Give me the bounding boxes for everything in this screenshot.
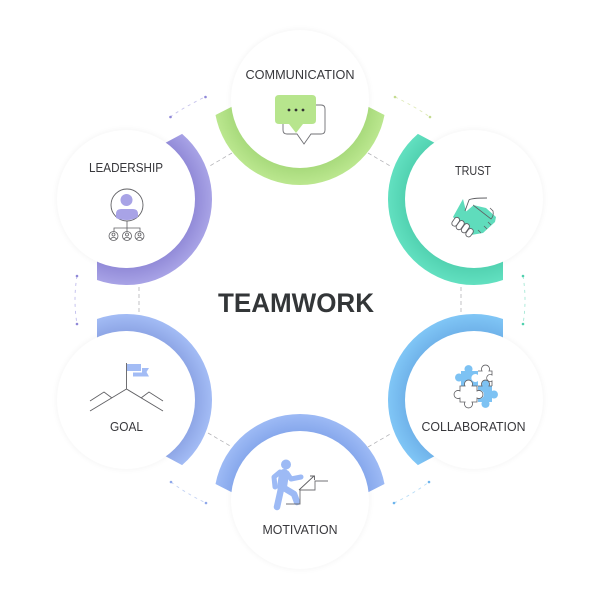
- arc: goal: [97, 314, 212, 465]
- disc shadow: leadership: [56, 129, 196, 269]
- disc shadow: motivation: [230, 430, 370, 570]
- label: collaboration: COLLABORATION: [422, 420, 526, 434]
- panel: collaboration: [388, 314, 544, 470]
- arc: communication: [216, 99, 384, 185]
- panel: leadership: [56, 129, 212, 285]
- arc: collaboration: [388, 314, 503, 465]
- icon: leader and team: [109, 189, 144, 240]
- label: leadership: LEADERSHIP: [89, 161, 163, 175]
- outer dashed link: leadership to goal: [75, 275, 78, 325]
- panel: communication: [216, 29, 384, 185]
- icon: person climbing stairs: [274, 460, 328, 507]
- arc: trust: [388, 134, 503, 285]
- panel: goal: [56, 314, 212, 470]
- disc shadow: collaboration: [404, 330, 544, 470]
- disc: collaboration: [405, 331, 543, 469]
- disc shadow: communication: [230, 29, 370, 169]
- label: goal: GOAL: [110, 420, 143, 434]
- icon: flag on mountain: [90, 363, 163, 411]
- panel: trust: [388, 129, 544, 285]
- outer dashed link: communication to trust: [394, 96, 431, 118]
- label: communication: COMMUNICATION: [246, 68, 354, 82]
- arc: motivation: [216, 414, 384, 500]
- disc: trust: [405, 130, 543, 268]
- title: TEAMWORK: [218, 288, 374, 318]
- disc shadow: goal: [56, 330, 196, 470]
- disc: motivation: [231, 431, 369, 569]
- icon: speech bubbles: [275, 95, 325, 144]
- inner dashed connectors: [139, 153, 461, 447]
- icon: puzzle pieces: [454, 365, 498, 408]
- outer dashed link: trust to collaboration: [522, 275, 525, 325]
- outer dashed link: motivation to collaboration: [393, 481, 430, 504]
- panel: motivation: [216, 414, 384, 570]
- label: trust: TRUST: [455, 164, 491, 178]
- outer dashed link: leadership to communication: [169, 96, 207, 118]
- outer dashed link: goal to motivation: [170, 481, 207, 504]
- disc: goal: [57, 331, 195, 469]
- icon: handshake: [451, 198, 496, 238]
- disc shadow: trust: [404, 129, 544, 269]
- arc: leadership: [97, 134, 212, 285]
- disc: leadership: [57, 130, 195, 268]
- label: motivation: MOTIVATION: [262, 523, 338, 537]
- disc: communication: [231, 30, 369, 168]
